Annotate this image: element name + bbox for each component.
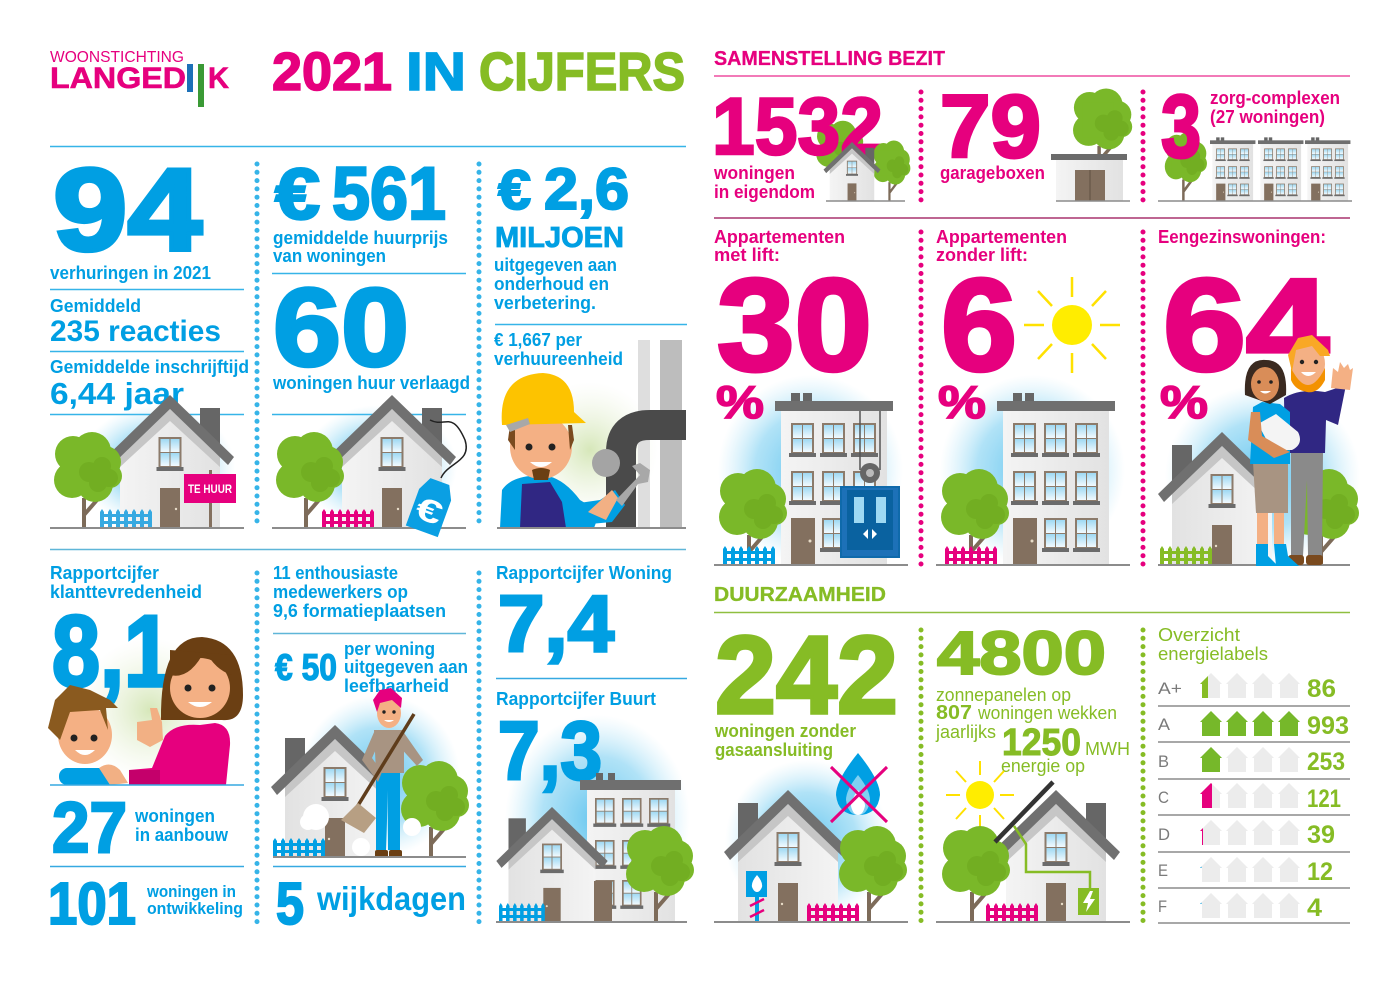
stat: 27 in aanbouw bbox=[52, 789, 229, 868]
heading: samenstelling bezit: SAMENSTELLING BEZIT bbox=[714, 48, 945, 70]
stat: 50 euro per woning: per woning bbox=[344, 638, 435, 659]
row: F: 4 bbox=[1307, 894, 1322, 922]
row: D bbox=[1159, 820, 1334, 845]
illustration: family and house bbox=[1158, 335, 1359, 566]
logo: LANGED bbox=[50, 62, 186, 95]
text: medewerkers: medewerkers op bbox=[273, 581, 408, 602]
stat: rapportcijfer buurt: 7,3 bbox=[498, 704, 602, 797]
panel: eengezinswoningen: Eengezinswoningen: bbox=[1158, 226, 1326, 247]
illustration: neighbourhood bbox=[496, 773, 694, 923]
row: A+: 86 bbox=[1307, 675, 1336, 703]
stat: 50 euro per woning: uitgegeven aan bbox=[344, 656, 468, 677]
text: per verhuureenheid: verhuureenheid bbox=[494, 349, 623, 369]
illustration: worker with wrench bbox=[497, 340, 686, 528]
row: E: 12 bbox=[1307, 858, 1333, 886]
panel: klanttevredenheid bbox=[48, 562, 244, 937]
stat: 2,6 miljoen: uitgegeven aan bbox=[494, 255, 617, 275]
stat: 101 in ontwikkeling: woningen in bbox=[146, 883, 236, 901]
illustration: garage bbox=[1051, 88, 1132, 201]
text: medewerkers: 11 enthousiaste bbox=[273, 562, 398, 583]
icon: gas meter bbox=[746, 871, 767, 922]
stat: 101 in ontwikkeling: ontwikkeling bbox=[147, 900, 243, 918]
panel: medewerkers en leefbaarheid bbox=[271, 562, 469, 937]
logo: K bbox=[208, 62, 229, 95]
row: A+ bbox=[1158, 673, 1336, 698]
panel: zonnepanelen bbox=[935, 619, 1130, 923]
row: B: 253 bbox=[1307, 748, 1345, 776]
logo bbox=[50, 49, 229, 107]
panel: verhuringen bbox=[50, 144, 249, 528]
panel: zonnepanelen: woningen wekken bbox=[977, 703, 1117, 723]
stat: inschrijftijd: 6,44 jaar bbox=[50, 376, 184, 411]
illustration: house with solar panels bbox=[936, 782, 1130, 923]
row: E: E bbox=[1158, 861, 1168, 880]
panel: appartementen met lift: Appartementen bbox=[714, 226, 845, 247]
panel: appartementen zonder lift: 6 bbox=[941, 251, 1017, 398]
stat: 101 in ontwikkeling bbox=[48, 871, 243, 937]
woman with baby bbox=[1245, 360, 1300, 566]
text: medewerkers bbox=[273, 562, 446, 621]
text: medewerkers: 9,6 formatieplaatsen bbox=[273, 600, 446, 621]
row: F bbox=[1159, 893, 1322, 918]
panel: 3 zorgcomplexen: zorg-complexen bbox=[1210, 88, 1340, 108]
row: A+: A+ bbox=[1158, 679, 1182, 698]
row: B bbox=[1158, 747, 1345, 776]
illustration: customers thumbs up: 8,1 bbox=[52, 596, 172, 708]
panel: onderhoud bbox=[494, 157, 687, 528]
stat: reacties: 235 reacties bbox=[50, 315, 221, 348]
stat: 5 wijkdagen: wijkdagen bbox=[316, 880, 466, 917]
stat: 27 in aanbouw: in aanbouw bbox=[135, 825, 229, 845]
stat: 2,6 miljoen: MILJOEN bbox=[495, 222, 624, 254]
panel: 1532 woningen: woningen bbox=[713, 163, 795, 183]
panel: appartementen met lift: 30 bbox=[717, 251, 872, 398]
panel: zonnepanelen: energie op bbox=[1001, 756, 1085, 776]
title bbox=[272, 42, 685, 102]
panel: zonnepanelen: jaarlijks bbox=[935, 722, 996, 742]
panel: appartementen met lift: met lift: bbox=[714, 244, 780, 265]
panel: huurprijs bbox=[272, 152, 470, 537]
row: D: 39 bbox=[1307, 821, 1335, 849]
logo: WOONSTICHTING bbox=[50, 49, 184, 66]
illustration: building without lift bbox=[936, 393, 1130, 565]
stat: rapportcijfer woning: Rapportcijfer Woning bbox=[496, 562, 672, 583]
illustration: house with price tag: € bbox=[411, 489, 448, 532]
illustration: man sweeping bbox=[271, 688, 469, 858]
panel: appartementen met lift: % bbox=[716, 376, 764, 428]
illustration: house to rent: TE HUUR bbox=[188, 484, 233, 496]
panel: zonnepanelen: 1250 bbox=[1002, 722, 1081, 764]
panel: 242 woningen zonder gas: woningen zonder bbox=[714, 720, 856, 741]
panel: 3 zorgcomplexen: (27 woningen) bbox=[1210, 107, 1325, 127]
stat: inschrijftijd bbox=[50, 356, 249, 411]
panel: 1532 woningen: in eigendom bbox=[714, 182, 815, 202]
row: A bbox=[1158, 711, 1349, 740]
stat: rapportcijfer woning bbox=[496, 562, 672, 668]
row: C: C bbox=[1158, 788, 1169, 807]
title: IN bbox=[406, 42, 466, 102]
stat: inschrijftijd: Gemiddelde inschrijftijd bbox=[50, 356, 249, 377]
stat: 50 euro per woning: leefbaarheid bbox=[344, 675, 449, 696]
stat: 561 euro: 561 bbox=[332, 152, 446, 235]
panel: eengezinswoningen: 64 bbox=[1163, 251, 1329, 398]
man bbox=[1284, 335, 1353, 565]
illustration: house without gas bbox=[714, 753, 908, 923]
illustration: care complexes bbox=[1158, 137, 1352, 201]
title: 2021 bbox=[272, 42, 392, 102]
stat: 5 wijkdagen: 5 bbox=[276, 871, 304, 937]
row: C bbox=[1158, 783, 1340, 808]
stat: 5 wijkdagen bbox=[276, 871, 466, 937]
stat: 2,6 miljoen: 2,6 bbox=[544, 157, 629, 222]
panel: rapportcijfers woning en buurt bbox=[496, 562, 694, 923]
text: per verhuureenheid bbox=[494, 330, 623, 369]
panel: energielabels: energielabels bbox=[1158, 644, 1268, 664]
panel: 79 garageboxen bbox=[940, 76, 1132, 201]
panel: 242 woningen zonder gas: gasaansluiting bbox=[715, 739, 833, 760]
illustration: house with price tag bbox=[272, 395, 466, 537]
heading: duurzaamheid: DUURZAAMHEID bbox=[714, 584, 886, 606]
text: per verhuureenheid: € 1,667 per bbox=[494, 330, 582, 350]
stat: 561 euro: van woningen bbox=[273, 245, 386, 266]
panel: 3 zorgcomplexen: 3 bbox=[1161, 76, 1201, 176]
stat: 50 euro per woning: € 50 bbox=[275, 647, 337, 688]
stat: 60: 60 bbox=[273, 266, 409, 390]
row: D: D bbox=[1158, 825, 1170, 844]
panel: eengezinswoningen bbox=[1158, 226, 1360, 566]
row: E bbox=[1159, 857, 1332, 882]
stat: rapportcijfer woning: 7,4 bbox=[498, 579, 615, 668]
panel: 242 woningen zonder gas: 242 bbox=[715, 614, 898, 737]
panel: appartementen zonder lift: Appartementen bbox=[936, 226, 1067, 247]
panel: 242 woningen zonder gas bbox=[714, 614, 908, 923]
row: A: 993 bbox=[1307, 712, 1349, 740]
stat: rapportcijfer buurt bbox=[496, 688, 690, 922]
panel: appartementen zonder lift: % bbox=[938, 376, 986, 428]
stat: 561 euro bbox=[273, 152, 448, 266]
panel: energielabels bbox=[1158, 625, 1350, 923]
panel: appartementen zonder lift bbox=[936, 226, 1130, 565]
heading: rapportcijfer klanttevredenheid: klanttevredenheid bbox=[50, 581, 202, 602]
heading: rapportcijfer klanttevredenheid bbox=[50, 562, 202, 602]
illustration: customers thumbs up bbox=[48, 596, 244, 785]
panel: zonnepanelen: 807 bbox=[936, 702, 972, 724]
panel: 1532 woningen: 1532 bbox=[712, 82, 883, 172]
stat: 2,6 miljoen: € bbox=[498, 158, 531, 221]
panel: appartementen met lift bbox=[714, 226, 908, 565]
stat: 27 in aanbouw: 27 bbox=[52, 789, 127, 868]
stat: reacties bbox=[50, 295, 221, 348]
stat: 2,6 miljoen: onderhoud en bbox=[494, 274, 609, 294]
row: A: A bbox=[1158, 715, 1171, 734]
panel: energielabels: Overzicht bbox=[1158, 625, 1240, 645]
stat: 561 euro: € bbox=[275, 155, 320, 235]
icon: gas flame crossed bbox=[831, 753, 887, 822]
panel: zonnepanelen: MWH bbox=[1085, 739, 1130, 759]
panel: zonnepanelen: 4800 bbox=[937, 619, 1106, 687]
panel: 3 zorgcomplexen bbox=[1158, 76, 1352, 201]
illustration: building with lift bbox=[714, 393, 908, 565]
panel: 1532 woningen bbox=[712, 82, 910, 202]
illustration: small house bbox=[824, 141, 910, 201]
icon: sun bbox=[1024, 277, 1120, 373]
stat: 94 verhuringen: 94 bbox=[53, 144, 202, 275]
stat: 2,6 miljoen: verbetering. bbox=[494, 293, 596, 313]
stat: 101 in ontwikkeling: 101 bbox=[48, 871, 136, 937]
panel: 79 garageboxen: 79 bbox=[940, 76, 1041, 176]
panel: zonnepanelen: zonnepanelen op bbox=[936, 685, 1071, 705]
row: B: B bbox=[1158, 752, 1169, 771]
illustration: house to rent bbox=[50, 395, 244, 528]
stat: 94 verhuringen: verhuringen in 2021 bbox=[50, 263, 211, 283]
icon: sun small bbox=[946, 761, 1014, 829]
stat: 2,6 miljoen bbox=[494, 157, 629, 313]
stat: 27 in aanbouw: woningen bbox=[134, 806, 215, 826]
stat: 561 euro: gemiddelde huurprijs bbox=[273, 227, 448, 248]
row: F: F bbox=[1158, 897, 1167, 916]
panel: eengezinswoningen: % bbox=[1160, 376, 1208, 428]
panel: 79 garageboxen: garageboxen bbox=[940, 163, 1045, 183]
heading: rapportcijfer klanttevredenheid: Rapportcijfer bbox=[50, 562, 159, 583]
stat: rapportcijfer buurt: Rapportcijfer Buurt bbox=[496, 688, 656, 709]
title: CIJFERS bbox=[479, 42, 685, 102]
row: C: 121 bbox=[1307, 785, 1341, 813]
stat: 60 bbox=[272, 266, 470, 393]
stat: 60: woningen huur verlaagd bbox=[272, 372, 470, 393]
stat: 50 euro per woning bbox=[275, 638, 468, 696]
stat: reacties: Gemiddeld bbox=[50, 295, 141, 316]
panel: appartementen zonder lift: zonder lift: bbox=[936, 244, 1028, 265]
